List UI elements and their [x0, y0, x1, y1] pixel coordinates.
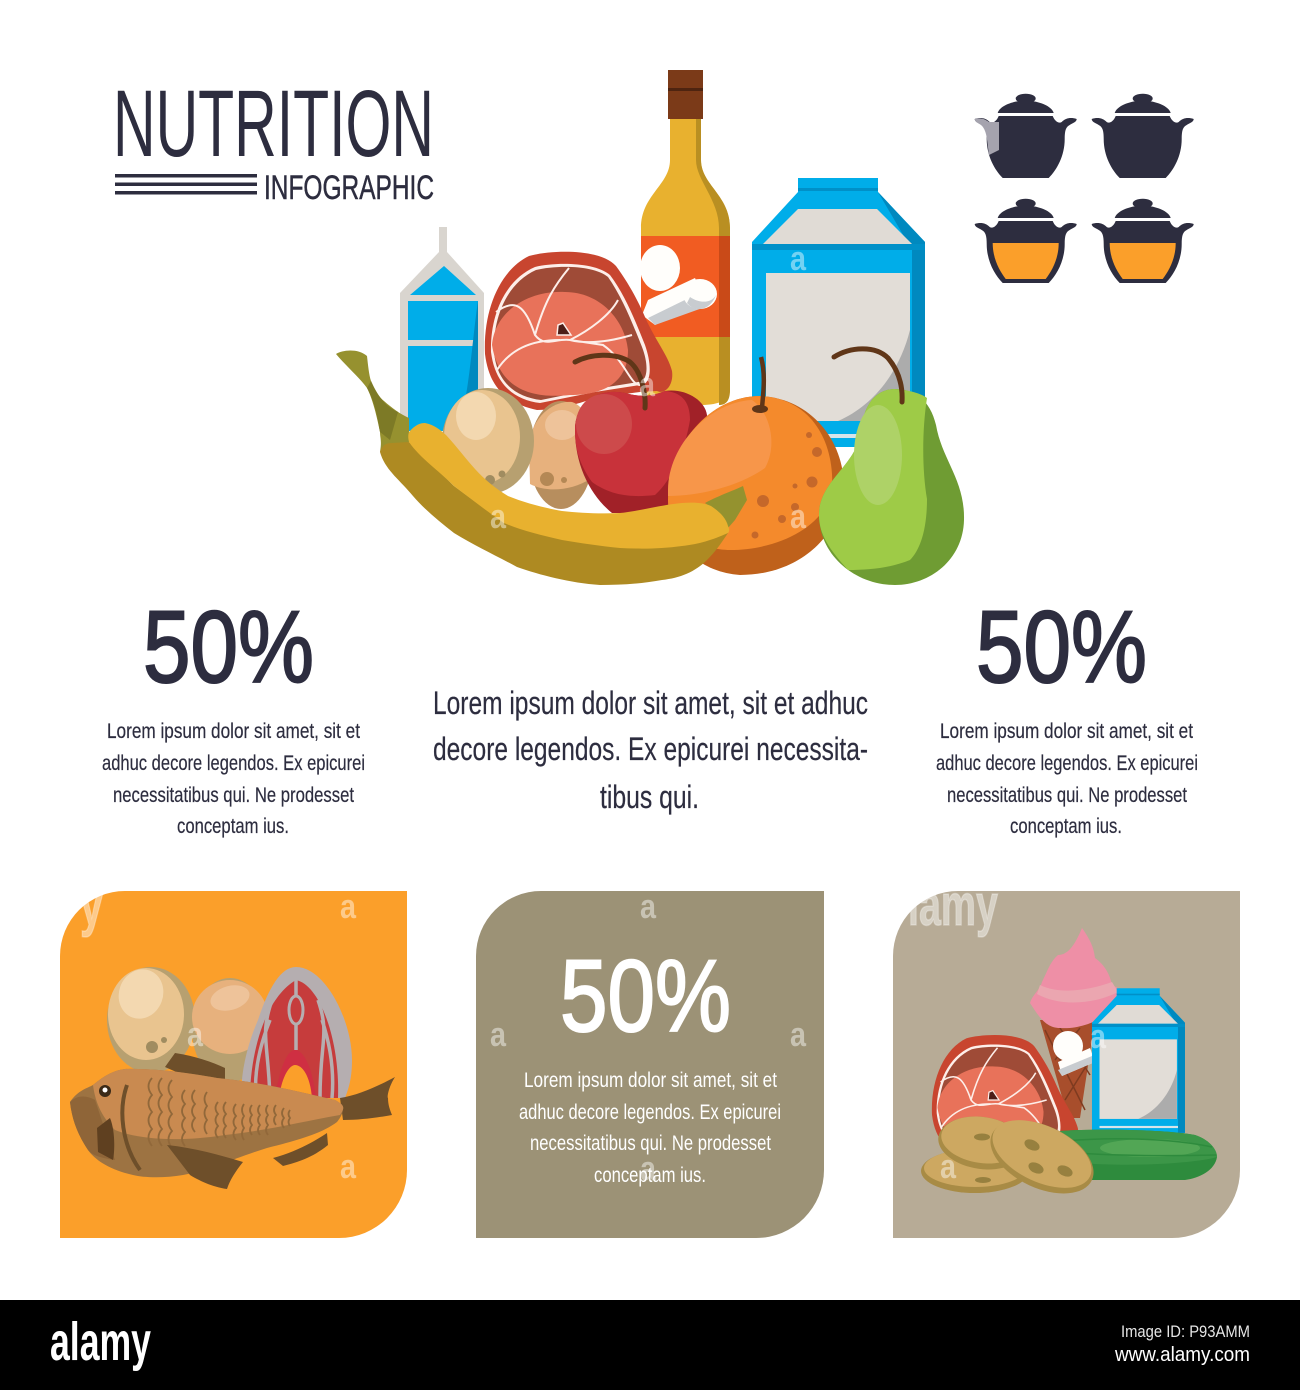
icon: small milk carton: [400, 227, 484, 431]
icon group: four pots: [975, 94, 1194, 283]
description: necessitatibus qui. Ne prodesset: [530, 1131, 771, 1155]
description: [519, 1068, 781, 1187]
icon: orange pot 2: [1092, 199, 1194, 283]
description: conceptam ius.: [1010, 814, 1122, 838]
watermark tint on pot 1: [975, 118, 999, 155]
description: conceptam ius.: [594, 1163, 706, 1187]
description: adhuc decore legendos. Ex epicurei: [519, 1100, 781, 1124]
stat: right 50%: [936, 590, 1198, 838]
footer background: [0, 1300, 1300, 1390]
icon: pear: [819, 349, 964, 585]
watermark letters: a: [790, 1016, 807, 1054]
panel background: [893, 891, 1240, 1238]
hero illustration: groceries: [336, 70, 964, 585]
watermark letters: a: [639, 366, 656, 404]
footer image id: Image ID: P93AMM: [1121, 1322, 1250, 1341]
icon: chicken drumstick bone: [640, 245, 717, 325]
number: 50%: [976, 590, 1147, 704]
icon: large milk carton: [752, 178, 925, 447]
description: necessitatibus qui. Ne prodesset: [947, 783, 1187, 807]
icon: eggs: [442, 388, 594, 509]
number: 50%: [560, 939, 731, 1053]
description: conceptam ius.: [177, 814, 289, 838]
watermark letters: [80, 240, 1107, 1188]
text block: centre paragraph: decore legendos. Ex epicurei necessita-: [433, 731, 868, 767]
decorative lines beside subtitle: [115, 174, 257, 194]
icon: cucumber: [1058, 1130, 1217, 1180]
watermark letters: a: [940, 1148, 957, 1186]
icon: salmon steak: [242, 967, 352, 1098]
description: [102, 719, 365, 838]
footer logo: alamy: [50, 1312, 151, 1372]
watermark letters: a: [640, 888, 657, 926]
panel background: [476, 891, 824, 1238]
text block: centre paragraph: [433, 685, 868, 815]
watermark letters: a: [340, 1148, 357, 1186]
icon: cookies: [921, 1106, 1105, 1208]
icon: banana: [336, 350, 747, 585]
watermark letters: a: [790, 498, 807, 536]
description: adhuc decore legendos. Ex epicurei: [936, 751, 1198, 775]
icon: eggs: [107, 963, 268, 1082]
icon: milk carton: [1092, 988, 1185, 1133]
panel: protein foods (orange): [60, 891, 407, 1238]
description: Lorem ipsum dolor sit amet, sit et: [524, 1068, 777, 1092]
subheading: INFOGRAPHIC: INFOGRAPHIC: [264, 169, 434, 207]
description: adhuc decore legendos. Ex epicurei: [102, 751, 365, 775]
icon: ham steak: [485, 252, 672, 410]
footer url: www.alamy.com: [1114, 1344, 1250, 1366]
watermark letters: a: [490, 1016, 507, 1054]
description: Lorem ipsum dolor sit amet, sit et: [940, 719, 1193, 743]
icon: oil bottle: [641, 70, 730, 405]
icon: ice cream cone: [1030, 928, 1122, 1118]
watermark letters: a: [490, 498, 507, 536]
icon: orange pot 1: [975, 199, 1077, 283]
watermark letters: lamy: [908, 873, 998, 938]
watermark letters: a: [187, 1016, 204, 1054]
heading: NUTRITION: NUTRITION: [113, 71, 434, 177]
icon: fish: [70, 1053, 395, 1189]
panel background: [60, 891, 407, 1238]
icon: red apple: [575, 355, 707, 513]
title: Nutrition Infographic: [113, 71, 434, 207]
icon: drumstick bone: [1053, 1031, 1095, 1076]
icon: dark pot 2: [1092, 94, 1194, 178]
panel: 50% info (taupe): [476, 891, 824, 1238]
watermark letters: a: [790, 240, 807, 278]
stat: left 50%: [102, 590, 365, 838]
description: Lorem ipsum dolor sit amet, sit et: [107, 719, 360, 743]
text block: centre paragraph: tibus qui.: [600, 779, 699, 815]
icon: orange: [668, 357, 844, 575]
description: necessitatibus qui. Ne prodesset: [113, 783, 354, 807]
panel: treats and mixed foods (beige): [893, 891, 1240, 1238]
text block: centre paragraph: Lorem ipsum dolor sit amet, sit et adhuc: [433, 685, 868, 721]
watermark letters: a: [640, 1150, 657, 1188]
watermark letters: a: [340, 888, 357, 926]
icon: dark pot 1: [975, 94, 1077, 178]
description: [936, 719, 1198, 838]
number: 50%: [143, 590, 314, 704]
icon: ham steak: [932, 1035, 1078, 1158]
watermark letters: a: [1090, 1018, 1107, 1056]
footer bar: [0, 1300, 1300, 1390]
watermark letters: y: [80, 873, 103, 938]
